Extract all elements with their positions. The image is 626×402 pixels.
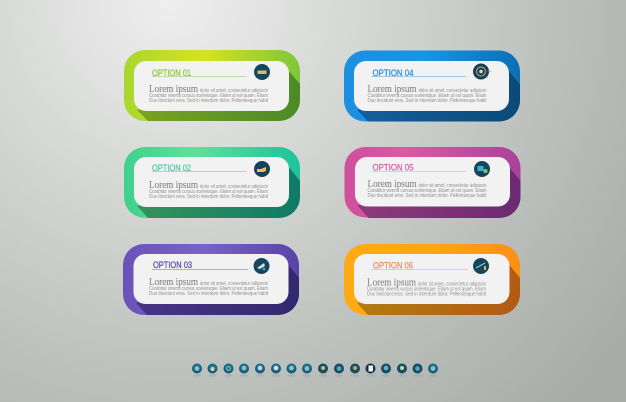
heading: option 03: OPTION 03	[153, 260, 192, 271]
heading: option 04: OPTION 04	[372, 68, 414, 79]
text block	[149, 276, 269, 297]
panel: option 03	[123, 244, 299, 315]
text block: dolor sit amet, consectetur adipiscin	[200, 184, 268, 190]
icon: chart and leaves	[474, 161, 490, 177]
text block: Duo tincidunt eros. Sed in interdum dolor. Pellentesque habit	[368, 193, 487, 199]
text block: Curabitur viverra cursus scelerisque. Etiam ut est quam. Etiam	[149, 189, 268, 195]
icon: hand	[254, 161, 270, 177]
text block	[368, 178, 487, 199]
text block: Lorem ipsum	[368, 83, 417, 95]
text block: Duo tincidunt eros. Sed in interdum dolor. Pellentesque habit	[368, 98, 487, 104]
text block: Duo tincidunt eros. Sed in interdum dolor. Pellentesque habit	[367, 292, 487, 298]
icon: target	[473, 64, 491, 80]
heading: option 02: OPTION 02	[152, 163, 191, 174]
text block: Lorem ipsum	[149, 83, 198, 95]
text block: dolor sit amet, consectetur adipiscin	[418, 282, 486, 288]
heading: option 05: OPTION 05	[372, 162, 414, 174]
text block: Lorem ipsum	[367, 276, 416, 288]
panel: option 06	[344, 244, 520, 315]
text block: dolor sit amet, consectetur adipiscin	[200, 88, 268, 94]
icon: megaphone	[254, 258, 270, 274]
text block: Curabitur viverra cursus scelerisque. Etiam ut est quam. Etiam	[149, 93, 268, 99]
text block: Lorem ipsum	[149, 276, 198, 288]
heading: option 01: OPTION 01	[152, 68, 191, 79]
text block: Curabitur viverra cursus scelerisque. Etiam ut est quam. Etiam	[368, 188, 486, 194]
text block: dolor sit amet, consectetur adipiscin	[418, 88, 487, 94]
icon row	[192, 364, 438, 377]
text block: Duo tincidunt eros. Sed in interdum dolor. Pellentesque habit	[149, 291, 269, 297]
icon: rising line	[473, 258, 489, 274]
text block: Curabitur viverra cursus scelerisque. Etiam ut est quam. Etiam	[149, 286, 268, 292]
text block	[367, 276, 487, 298]
text block	[368, 83, 487, 104]
text block	[149, 179, 269, 200]
panel: option 02	[124, 147, 300, 218]
text block: dolor sit amet, consectetur adipiscin	[200, 281, 268, 287]
heading: option 06: OPTION 06	[373, 260, 413, 272]
text block: Duo tincidunt eros. Sed in interdum dolor. Pellentesque habit	[149, 194, 269, 200]
text block: Lorem ipsum	[368, 178, 417, 190]
text block: Lorem ipsum	[149, 179, 198, 191]
text block	[149, 83, 269, 104]
panel: option 04	[344, 50, 520, 122]
text block: Duo tincidunt eros. Sed in interdum dolor. Pellentesque habit	[149, 98, 269, 104]
text block: Curabitur viverra cursus scelerisque. Etiam ut est quam. Etiam	[367, 286, 486, 292]
panel: option 01	[124, 50, 300, 121]
text block: dolor sit amet, consectetur adipiscin	[418, 183, 487, 189]
icon: memory chip	[254, 64, 270, 80]
text block: Curabitur viverra cursus scelerisque. Etiam ut est quam. Etiam	[368, 93, 486, 99]
panel: option 05	[344, 147, 520, 218]
